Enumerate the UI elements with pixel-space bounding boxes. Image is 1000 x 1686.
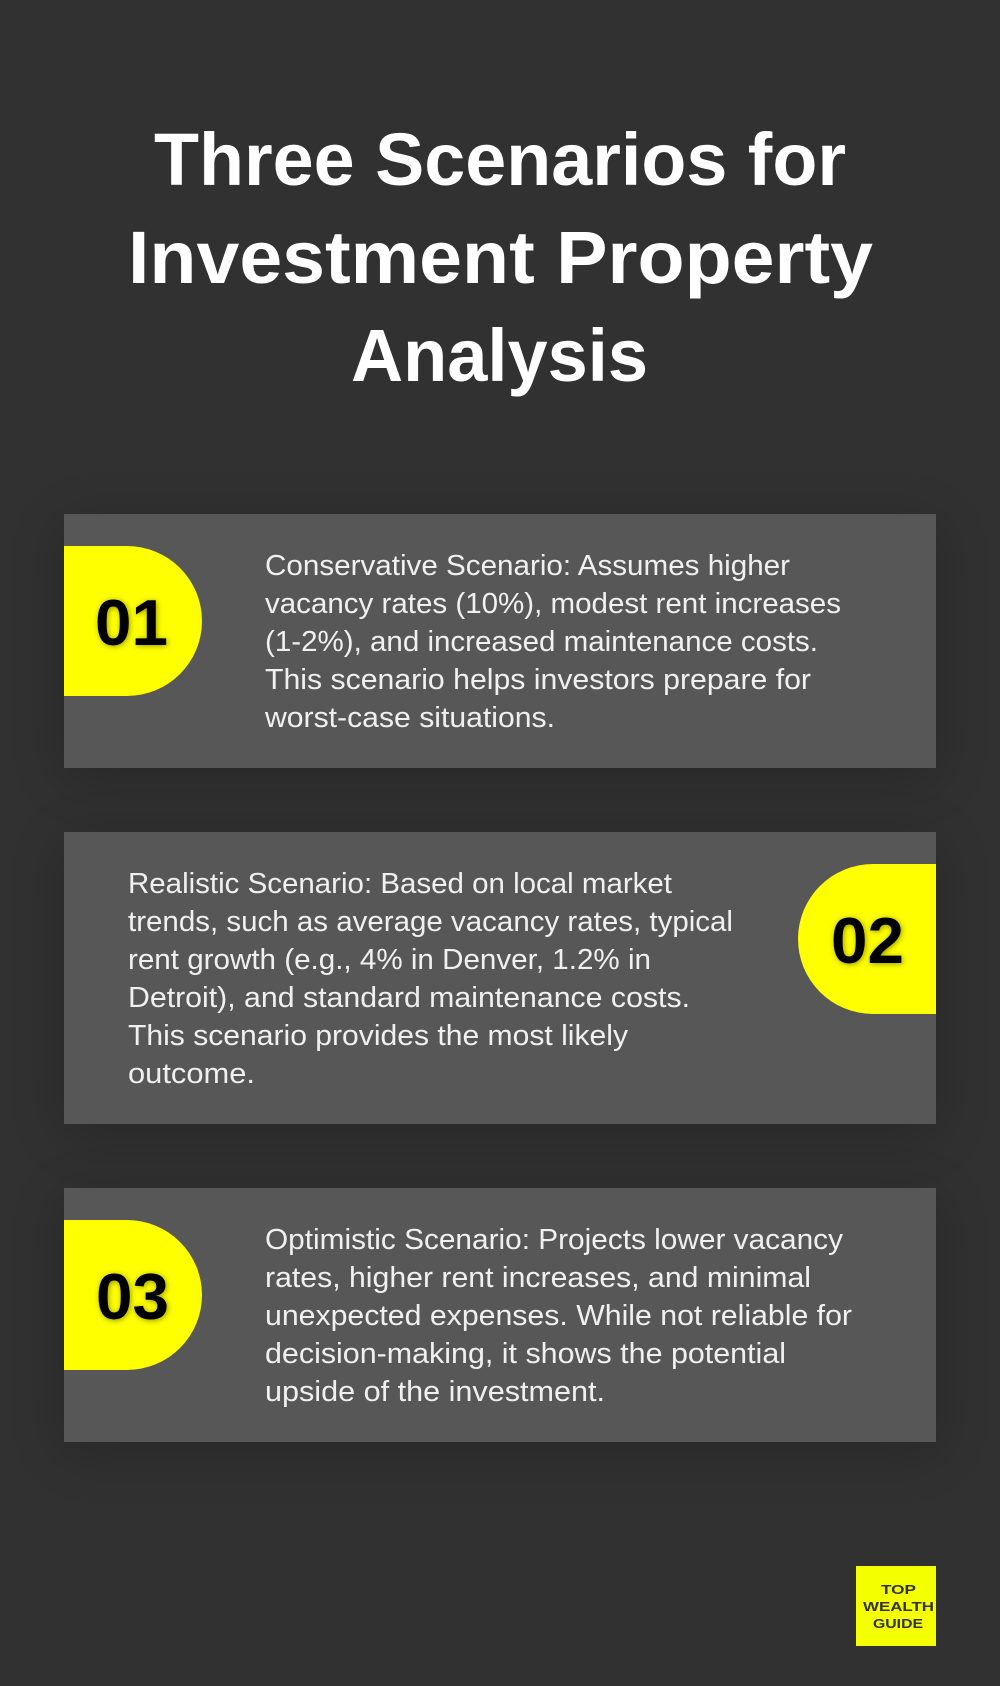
panel: conservative scenario bbox=[64, 514, 936, 768]
title: Analysis bbox=[351, 314, 648, 397]
text: conservative scenario: vacancy rates (10%), modest rent increases bbox=[265, 588, 841, 620]
logo: Top Wealth Guide: WEALTH bbox=[863, 1599, 934, 1614]
badge: 02 bbox=[798, 864, 936, 1014]
title: Investment Property bbox=[128, 216, 873, 299]
text: conservative scenario: worst-case situations. bbox=[264, 702, 555, 734]
logo: Top Wealth Guide: GUIDE bbox=[873, 1616, 923, 1631]
text: realistic scenario: outcome. bbox=[128, 1058, 255, 1090]
text: conservative scenario: This scenario helps investors prepare for bbox=[265, 664, 811, 696]
text: realistic scenario: Detroit), and standard maintenance costs. bbox=[128, 982, 690, 1014]
text: realistic scenario: rent growth (e.g., 4% in Denver, 1.2% in bbox=[128, 944, 651, 976]
panel: realistic scenario bbox=[64, 832, 936, 1124]
text: conservative scenario bbox=[264, 550, 841, 734]
text: realistic scenario: Realistic Scenario: Based on local market bbox=[128, 868, 672, 900]
badge: 02: 02 bbox=[831, 904, 904, 977]
text: realistic scenario: This scenario provides the most likely bbox=[128, 1020, 629, 1052]
text: realistic scenario: trends, such as average vacancy rates, typical bbox=[128, 906, 733, 938]
text: realistic scenario bbox=[128, 868, 733, 1090]
text: optimistic scenario: upside of the investment. bbox=[265, 1376, 605, 1408]
title: Three Scenarios for bbox=[154, 118, 846, 201]
text: optimistic scenario: decision-making, it shows the potential bbox=[265, 1338, 786, 1370]
title bbox=[128, 118, 873, 397]
badge: 03: 03 bbox=[96, 1260, 169, 1333]
text: conservative scenario: (1-2%), and increased maintenance costs. bbox=[265, 626, 818, 658]
badge: 01 bbox=[64, 546, 202, 696]
logo: Top Wealth Guide: TOP bbox=[881, 1582, 916, 1597]
text: optimistic scenario: unexpected expenses. While not reliable for bbox=[265, 1300, 852, 1332]
badge: 01: 01 bbox=[95, 586, 168, 659]
text: conservative scenario: Conservative Scenario: Assumes higher bbox=[265, 550, 790, 582]
text: optimistic scenario bbox=[265, 1224, 852, 1408]
badge: 03 bbox=[64, 1220, 202, 1370]
text: optimistic scenario: Optimistic Scenario: Projects lower vacancy bbox=[265, 1224, 843, 1256]
logo: Top Wealth Guide bbox=[856, 1566, 936, 1646]
text: optimistic scenario: rates, higher rent increases, and minimal bbox=[265, 1262, 811, 1294]
panel: optimistic scenario bbox=[64, 1188, 936, 1442]
